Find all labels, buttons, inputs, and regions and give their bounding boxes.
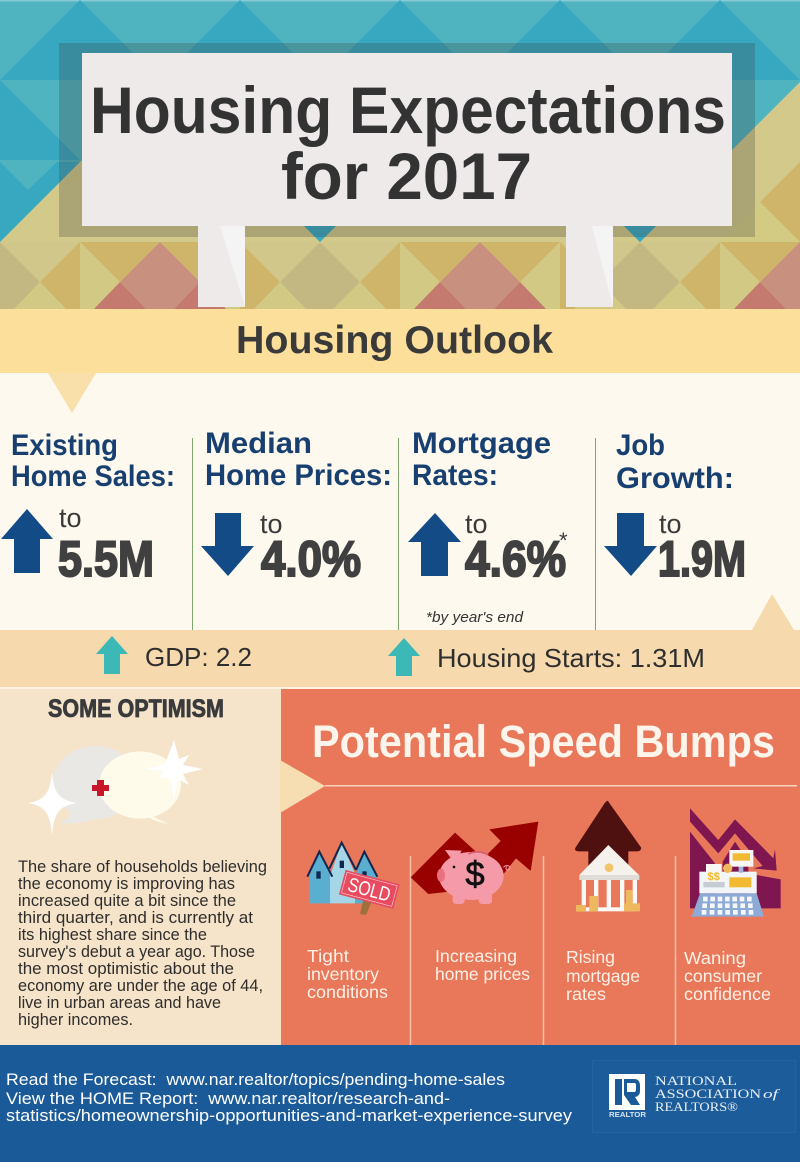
stat: mortgage rates: 4.6%	[465, 531, 566, 587]
stat: mortgage rates: Mortgage	[412, 427, 551, 460]
text block: optimism paragraph: the most optimistic about the	[18, 960, 234, 978]
logo: national association of realtors	[592, 1060, 796, 1132]
logo: national association of realtors: of	[763, 1086, 782, 1101]
stat: job growth: to	[659, 509, 682, 539]
stat: median home prices: Home Prices:	[205, 459, 392, 492]
sign post left	[198, 226, 245, 307]
text: rising mortgage rates	[566, 947, 640, 1004]
text block: optimism paragraph: The share of households believing	[18, 858, 267, 876]
stat: mortgage rates: to	[465, 509, 488, 539]
column dividers	[192, 438, 596, 630]
sign shadow frame	[59, 43, 755, 237]
logo: national association of realtors: REALTORS®	[655, 1099, 738, 1114]
stat: mortgage rates: *by year's end	[426, 610, 524, 626]
header background: triangle pattern	[0, 0, 800, 310]
text: increasing home prices: home prices	[435, 964, 530, 984]
text: waning consumer confidence: confidence	[684, 984, 771, 1004]
text: tight inventory conditions: inventory	[307, 964, 379, 984]
logo: national association of realtors: ASSOCIATION	[655, 1086, 762, 1101]
heading underline	[325, 785, 797, 786]
speed bump dividers	[410, 856, 676, 1045]
heading: some optimism: SOME OPTIMISM	[48, 695, 224, 723]
stat: mortgage rates	[408, 427, 568, 626]
text: rising mortgage rates: mortgage	[566, 966, 640, 986]
text: tight inventory conditions	[307, 946, 388, 1002]
stat: existing home sales: 5.5M	[58, 531, 154, 587]
logo: national association of realtors: NATIONAL	[655, 1073, 737, 1088]
stat: job growth: Job	[616, 429, 665, 462]
stat: job growth	[604, 429, 746, 587]
icon: houses with sold sign: SOLD	[345, 874, 393, 907]
text: tight inventory conditions: conditions	[307, 982, 388, 1002]
stat: existing home sales: Existing	[11, 429, 118, 462]
text: rising mortgage rates: Rising	[566, 947, 615, 967]
title: for 2017	[281, 139, 532, 213]
indicator: GDP	[96, 636, 252, 674]
stat: median home prices	[201, 427, 392, 587]
icon: cash register with falling arrow	[690, 808, 781, 917]
text: rising mortgage rates: rates	[566, 984, 606, 1004]
text block: optimism paragraph: live in urban areas and have	[18, 994, 221, 1012]
text: increasing home prices	[435, 946, 530, 984]
stat: mortgage rates: Rates:	[412, 459, 498, 492]
text: waning consumer confidence	[684, 948, 771, 1004]
stat: existing home sales: Home Sales:	[11, 460, 175, 493]
text: waning consumer confidence: consumer	[684, 966, 762, 986]
stat: median home prices: 4.0%	[261, 531, 361, 587]
icon: speech bubbles with sparkles	[28, 740, 203, 835]
text: increasing home prices: Increasing	[435, 946, 517, 966]
icon: piggy bank with rising arrow	[411, 822, 538, 904]
footer links: statistics/homeownership-opportunities-and-market-experience-survey	[6, 1107, 573, 1125]
stat: existing home sales	[1, 429, 175, 587]
text block: optimism paragraph: increased quite a bit since the	[18, 892, 236, 910]
text block: optimism paragraph	[18, 858, 267, 1029]
stat: median home prices: Median	[205, 427, 312, 460]
panel: outlook stats	[0, 373, 800, 630]
text: tight inventory conditions: Tight	[307, 946, 349, 966]
housing outlook banner	[0, 309, 800, 373]
stat: job growth: Growth:	[616, 462, 734, 495]
heading: housing outlook: Housing Outlook	[236, 319, 553, 362]
title	[90, 73, 726, 213]
stat: median home prices: to	[260, 509, 283, 539]
icon: piggy bank with rising arrow: $	[465, 855, 485, 893]
footer links: Read the Forecast: www.nar.realtor/topics/pending-home-sales	[6, 1071, 505, 1089]
footer	[0, 1045, 800, 1162]
text: waning consumer confidence: Waning	[684, 948, 746, 968]
indicator: GDP: GDP: 2.2	[145, 642, 252, 672]
sign post right	[566, 226, 613, 307]
stat: job growth: 1.9M	[658, 531, 746, 587]
indicator: housing starts	[388, 638, 705, 676]
chevron pointer	[280, 760, 325, 813]
title: Housing Expectations	[90, 73, 726, 147]
text block: optimism paragraph: third quarter, and is currently at	[18, 909, 253, 927]
text block: optimism paragraph: the economy is improving has	[18, 875, 235, 893]
text block: optimism paragraph: economy are under the age of 44,	[18, 977, 263, 995]
icon: bank with rising arrow	[575, 801, 641, 912]
stat: existing home sales: to	[59, 503, 82, 533]
heading: potential speed bumps: Potential Speed Bumps	[312, 716, 775, 767]
icon: cash register with falling arrow: $$	[707, 871, 721, 883]
text block: optimism paragraph: survey's debut a year ago. Those	[18, 943, 255, 961]
footer links	[6, 1071, 573, 1125]
indicator: housing starts: Housing Starts: 1.31M	[437, 643, 705, 673]
panel: potential speed bumps	[281, 689, 800, 1045]
sign board	[82, 53, 732, 226]
logo: national association of realtors: REALTOR	[609, 1112, 646, 1119]
banner pointer	[48, 373, 96, 413]
icon: houses with sold sign	[307, 843, 400, 915]
stat: mortgage rates: *	[559, 528, 568, 553]
footer links: View the HOME Report: www.nar.realtor/research-and-	[6, 1090, 450, 1108]
band: secondary indicators	[0, 594, 800, 689]
text block: optimism paragraph: its highest share since the	[18, 926, 207, 944]
panel: some optimism	[0, 689, 281, 1045]
text block: optimism paragraph: higher incomes.	[18, 1011, 133, 1029]
